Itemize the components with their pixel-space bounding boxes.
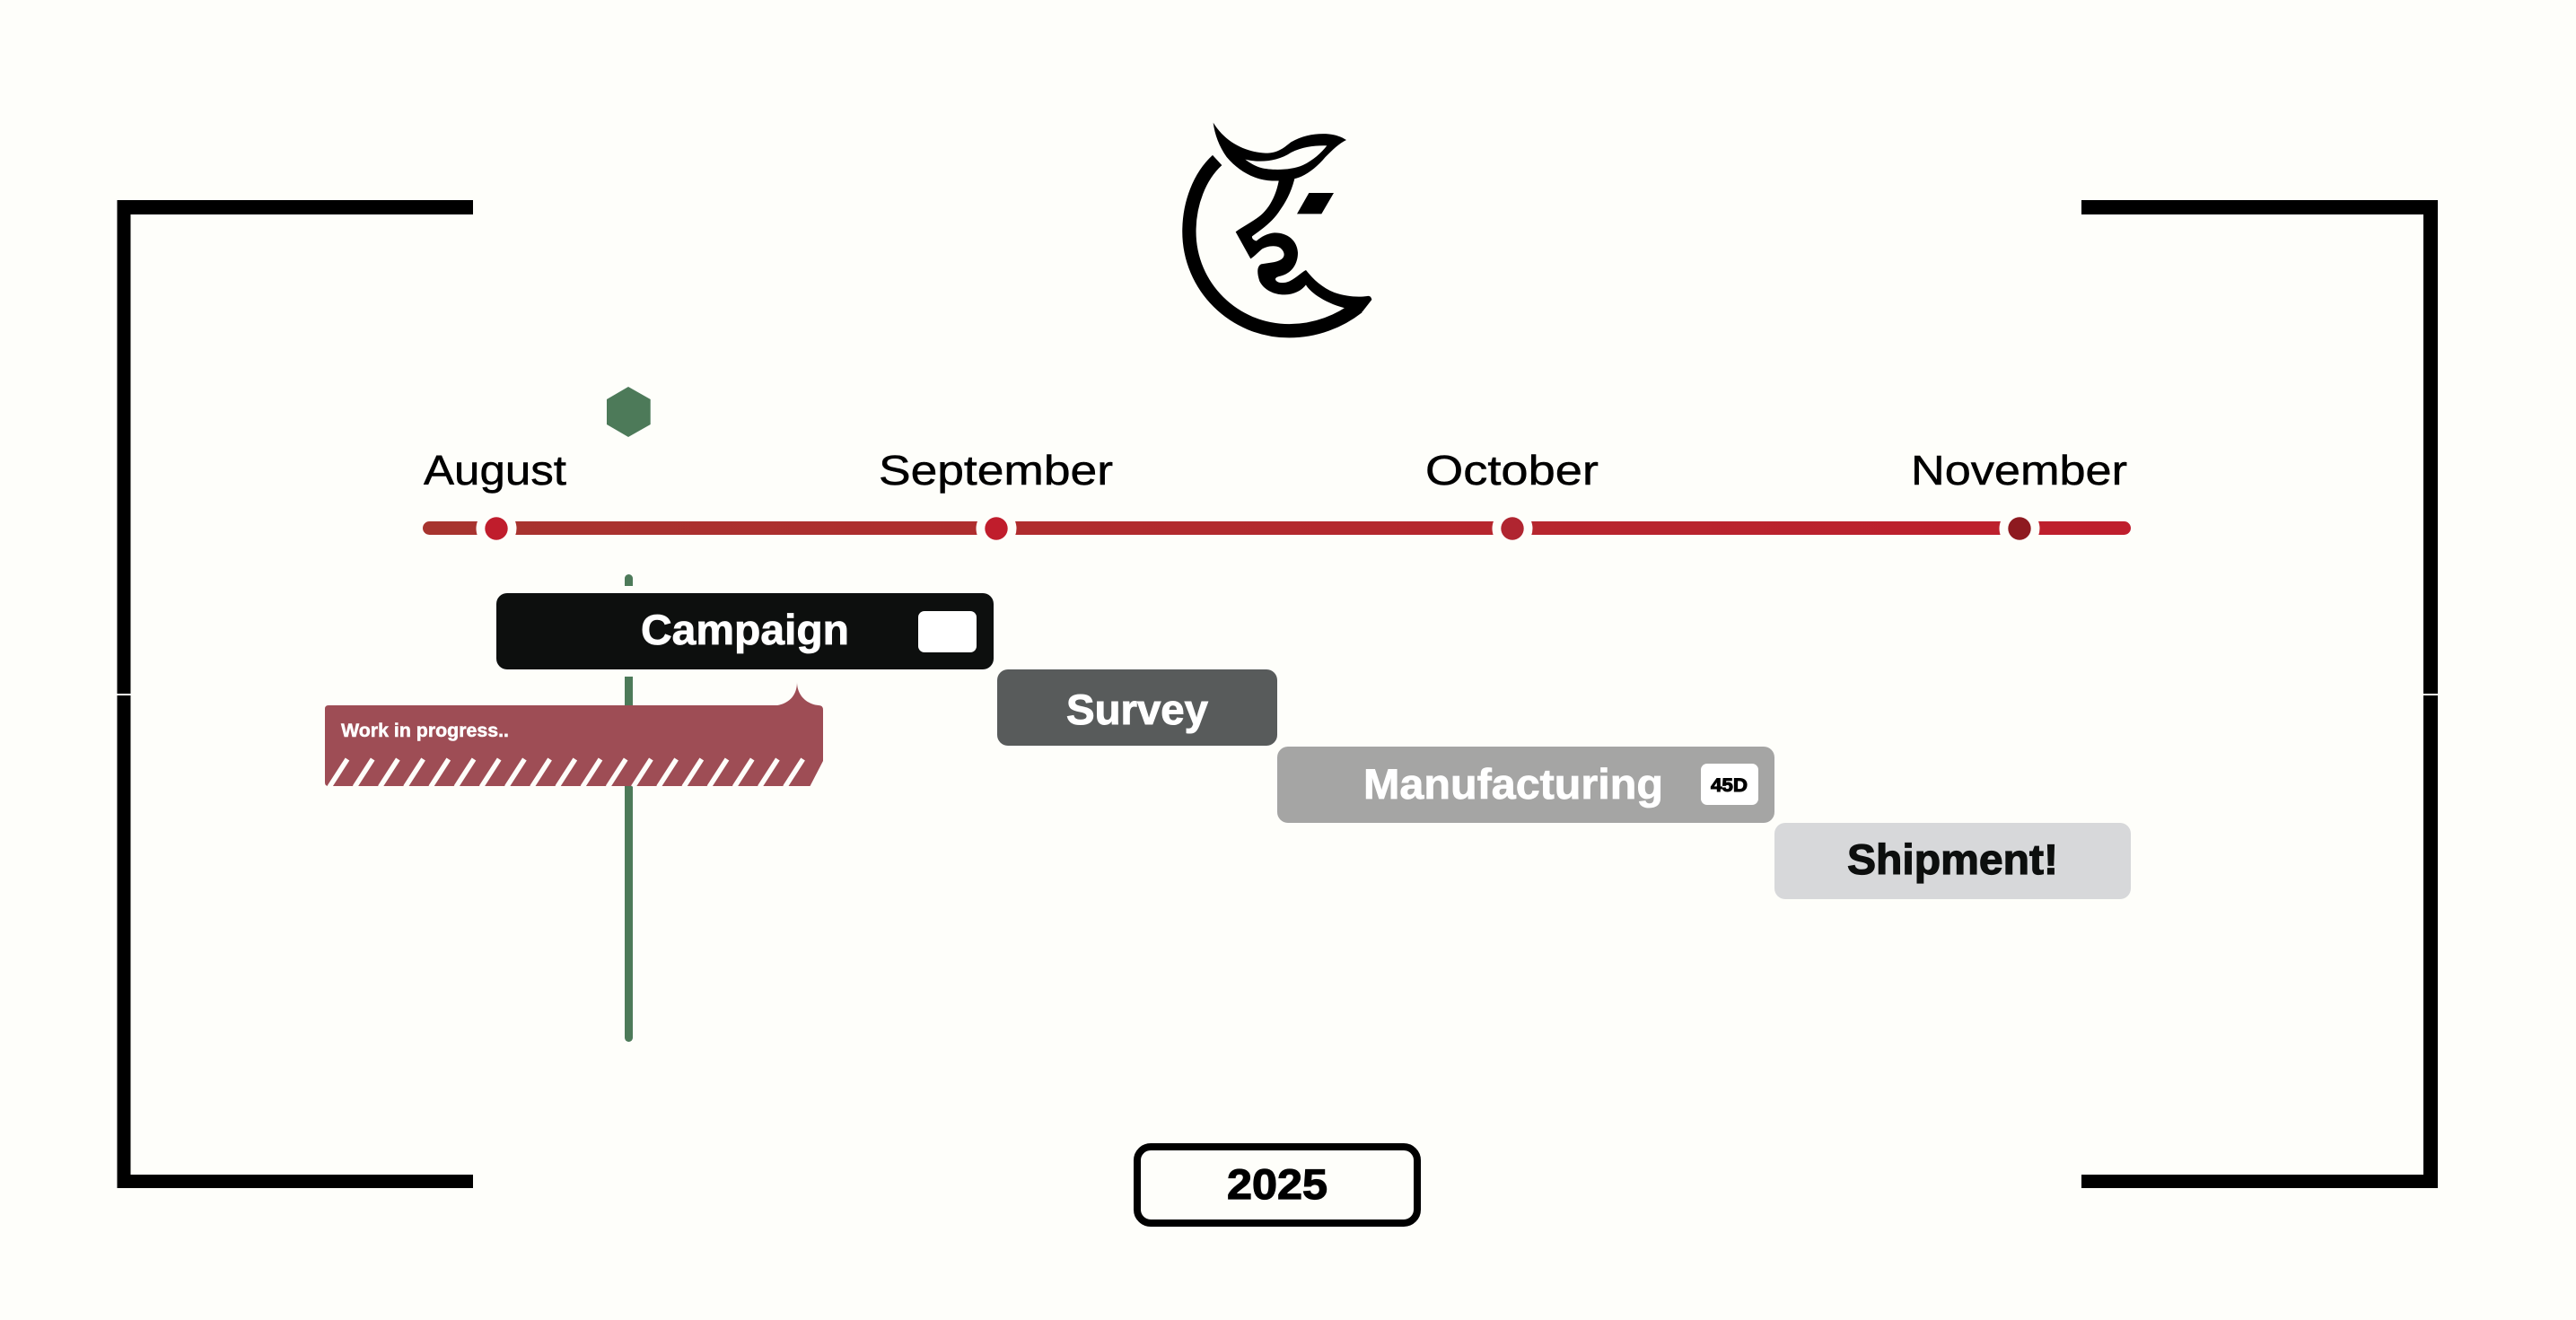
green vertical marker line	[625, 574, 633, 1042]
phase bar: Campaign	[496, 593, 994, 669]
month labels: October	[1425, 447, 1599, 494]
status callout: work in progress: Work in progress..	[341, 721, 509, 741]
phase bar: Campaign: Campaign	[641, 606, 849, 653]
icon: crescent moon face logo	[1189, 123, 1371, 331]
phase bar: Shipment	[1774, 823, 2131, 899]
phase bar: Survey	[997, 669, 1277, 746]
left frame bracket	[117, 200, 473, 1188]
right frame bracket	[2081, 200, 2438, 1188]
month labels: November	[1911, 447, 2127, 494]
year badge	[1137, 1147, 1417, 1223]
icon: green hexagon marker	[607, 387, 651, 437]
month labels: August	[424, 447, 566, 494]
phase bar: Manufacturing: Manufacturing	[1363, 760, 1663, 808]
phase bar: Shipment: Shipment!	[1847, 835, 2058, 883]
phase bar: Survey: Survey	[1066, 686, 1208, 733]
status callout: work in progress	[325, 682, 823, 787]
month labels: September	[879, 447, 1113, 494]
phase bar: Manufacturing: 45D	[1711, 775, 1748, 796]
phase bar: Manufacturing	[1277, 747, 1774, 823]
year badge: 2025	[1227, 1160, 1327, 1208]
timeline axis with month dots	[423, 508, 2131, 549]
month labels	[424, 447, 2127, 494]
